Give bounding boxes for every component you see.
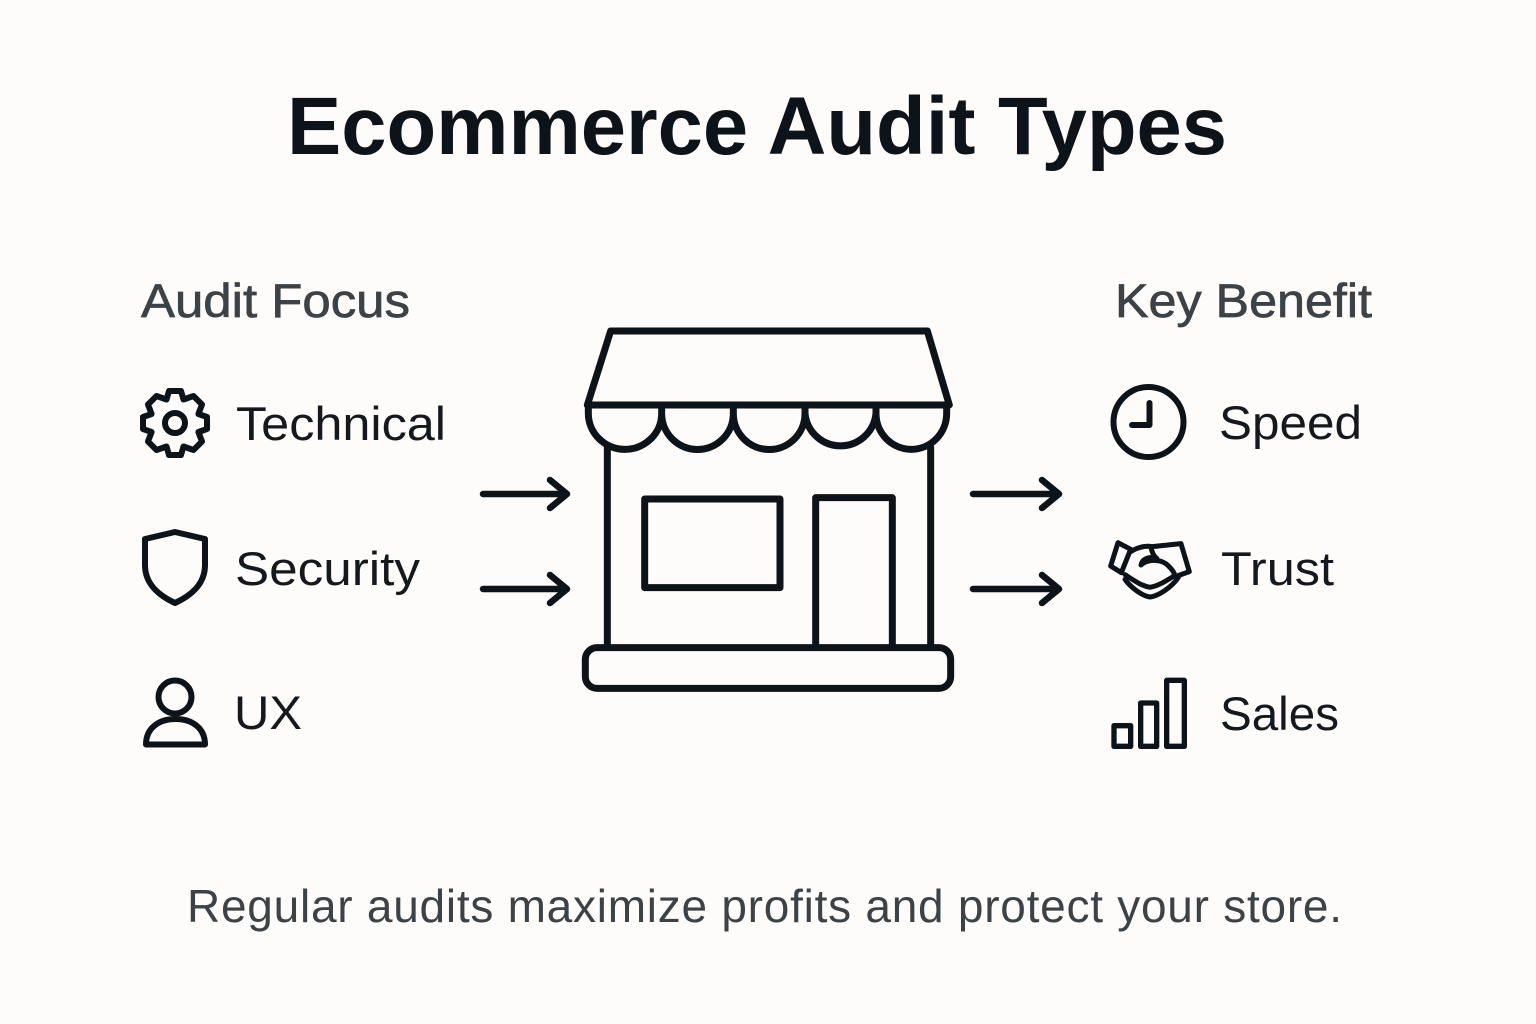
awning — [587, 331, 949, 405]
item: sales — [1114, 680, 1339, 746]
arrow: upper right — [973, 480, 1059, 508]
item: security — [145, 532, 421, 603]
window — [645, 499, 780, 588]
icon: handshake — [1111, 543, 1189, 597]
label: ux: UX — [234, 686, 302, 739]
title: Ecommerce Audit Types — [287, 81, 1227, 172]
arrows: focus into store — [483, 480, 567, 603]
icon: storefront — [585, 331, 951, 688]
arrows: store to benefits — [973, 480, 1059, 603]
icon: bar chart — [1114, 680, 1184, 746]
label: trust: Trust — [1221, 542, 1334, 595]
label: security: Security — [235, 542, 421, 595]
footer tagline: Regular audits maximize profits and protect your store. — [187, 880, 1342, 932]
arrow: lower left — [483, 575, 567, 603]
label: sales: Sales — [1220, 687, 1339, 740]
item: speed — [1114, 387, 1362, 457]
panel: audit focus — [141, 274, 446, 744]
label: technical: Technical — [236, 397, 446, 450]
label: speed: Speed — [1219, 396, 1362, 449]
arrow: upper left — [483, 480, 567, 508]
heading: audit focus: Audit Focus — [141, 274, 410, 327]
arrow: lower right — [973, 575, 1059, 603]
item: technical — [143, 391, 446, 455]
item: trust — [1111, 542, 1334, 597]
icon: gear — [143, 391, 207, 455]
walls — [607, 447, 931, 647]
door — [816, 498, 892, 647]
icon: clock — [1114, 387, 1184, 457]
icon: shield — [145, 532, 205, 603]
panel: key benefit — [1111, 274, 1372, 746]
icon: user — [146, 680, 205, 744]
heading: key benefit: Key Benefit — [1115, 274, 1372, 327]
base — [585, 648, 951, 688]
item: ux — [146, 680, 302, 744]
awning scallops — [588, 405, 947, 450]
